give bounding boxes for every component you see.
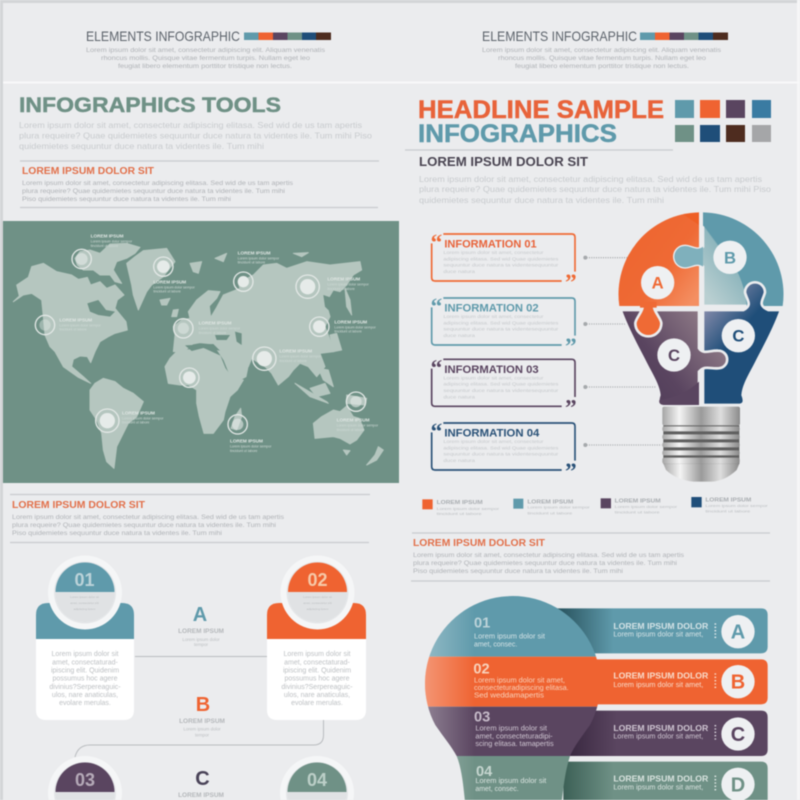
bar D: Lorem ipsum dolor sit amet,: [613, 784, 703, 791]
map labels: LOREM IPSUM: [238, 250, 271, 255]
section: lorem ipsum heading left top: Piso quidemietes sequuntur duce natura ta videntes ile. Tum mihi: [22, 196, 231, 203]
bar A: A: [731, 622, 745, 644]
information 04: adipiscing elitasa. Sed wid Quae quidemietes: [443, 445, 559, 451]
bar D: D: [731, 774, 745, 796]
legend: Lorem ipsum dolor sempor: [527, 506, 591, 510]
bar C: C: [731, 724, 745, 746]
bulb badge A: A: [652, 274, 664, 293]
label A: Lorem ipsum dolor: [182, 637, 220, 642]
band 02 text: [473, 661, 569, 699]
map labels: Lorem ipsum dolor sempor: [337, 424, 379, 428]
bar A: [557, 608, 768, 653]
panel: puzzle bulb and information boxes: [422, 212, 783, 516]
band 01 text: [474, 616, 545, 648]
map labels: tincidunt ut labore: [238, 261, 265, 265]
map labels: Lorem ipsum dolor sempor: [59, 323, 102, 327]
information 03: [431, 355, 577, 421]
card 01: Lorem ipsum dolor sit: [52, 651, 119, 658]
panel: striped bulb chart: [420, 592, 768, 800]
map labels: LOREM IPSUM: [199, 321, 232, 326]
map labels: tincidunt ut labore: [279, 359, 307, 363]
colour swatches: [675, 100, 771, 142]
card 02: evolare merulas.: [291, 700, 343, 707]
label A: LOREM IPSUM: [178, 628, 224, 635]
map labels: tincidunt ut labore: [230, 449, 258, 453]
section: lorem ipsum heading left top: Lorem ipsum dolor sit amet, consectetur adipiscing elitasa. Sed wid de us tam apertis: [22, 180, 294, 187]
section: lorem ipsum heading left bottom: [10, 494, 370, 542]
map labels: tincidunt ut labore: [337, 428, 364, 432]
map labels: LOREM IPSUM: [337, 418, 370, 423]
information 02: INFORMATION 02: [444, 303, 539, 315]
header: left elements infographic: rhoncus mollis. Quisque vitae fermentum turpis. Nullam eget leo: [101, 55, 310, 62]
information 03: “: [431, 355, 442, 381]
subheading right: Lorem ipsum dolor sit amet, consectetur adipiscing elitasa. Sed wid de us tam apertis: [419, 174, 762, 184]
label B: B: [196, 694, 210, 716]
band 01 text: Lorem ipsum dolor sit: [474, 633, 545, 640]
legend: Lorem ipsum dolor sempor: [705, 504, 769, 508]
card 02: ulos, nare anaticulas,: [284, 692, 350, 699]
card 02: Lorem ipsum dolor sit: [303, 595, 332, 599]
section: lorem ipsum heading right bottom: LOREM IPSUM DOLOR SIT: [413, 538, 545, 549]
title: infographics tools: INFOGRAPHICS TOOLS: [19, 94, 281, 117]
legend: LOREM IPSUM: [437, 500, 483, 506]
band 02 text: Lorem ipsum dolor sit amet,: [474, 678, 565, 685]
card 01: evolare merulas.: [59, 700, 111, 707]
bulb bands: [420, 592, 607, 800]
map labels: tincidunt ut labore: [153, 290, 181, 294]
information 03: duce natura: [443, 394, 475, 400]
label B: LOREM IPSUM: [179, 718, 225, 725]
label C: [178, 768, 224, 799]
legend: tincidunt ut labore: [615, 511, 660, 515]
card 02: Lorem ipsum dolor sit: [284, 651, 351, 658]
card 02: amet, consectetur elit: [303, 601, 332, 605]
headline sample: HEADLINE SAMPLE: [418, 96, 664, 124]
map labels: [59, 234, 379, 453]
legend: [422, 497, 769, 516]
header: right elements infographic: rhoncus mollis. Quisque vitae fermentum turpis. Nullam eget leo: [498, 55, 706, 62]
card 01: ipiscing elit. Quidenim: [51, 668, 119, 674]
map labels: Lorem ipsum dolor sempor: [279, 355, 322, 359]
information 02: [431, 294, 577, 360]
legend: Lorem ipsum dolor sempor: [437, 507, 500, 511]
map labels: LOREM IPSUM: [122, 410, 155, 415]
information 04: ”: [565, 459, 577, 485]
header: left elements infographic: ELEMENTS INFOGRAPHIC: [86, 28, 240, 44]
bar B: B: [731, 672, 745, 694]
bar C: [570, 711, 768, 756]
card 03: 03: [75, 770, 95, 790]
band 02 text: consecteturadipiscing elitasa.: [474, 685, 569, 692]
map labels: tincidunt ut labore: [91, 244, 118, 248]
map labels: LOREM IPSUM: [230, 439, 263, 444]
information 02: ”: [565, 334, 577, 360]
map labels: LOREM IPSUM: [59, 317, 92, 322]
band 01 text: amet, consec.: [474, 641, 517, 648]
information 04: [431, 419, 577, 485]
section: lorem ipsum heading left bottom: Lorem ipsum dolor sit amet, consectetur adipiscing elitasa. Sed wid de us tam apertis: [12, 514, 285, 521]
legend: tincidunt ut labore: [527, 511, 572, 515]
bar A: LOREM IPSUM DOLOR: [613, 621, 709, 631]
connector lines: [75, 656, 324, 757]
map labels: Lorem ipsum dolor sempor: [334, 325, 377, 329]
card 01: [36, 556, 134, 720]
card 03: [48, 756, 122, 800]
map labels: LOREM IPSUM: [153, 279, 186, 284]
header: right elements infographic: ELEMENTS INFOGRAPHIC: [482, 28, 637, 44]
map labels: Lorem ipsum dolor sempor: [238, 256, 280, 260]
legend: LOREM IPSUM: [705, 497, 752, 503]
section: lorem ipsum heading left bottom: plura requeire? Quae quidemietes sequuntur duce natura ta videntes ile. Tum mihi: [12, 522, 276, 529]
headline sample: INFOGRAPHICS: [418, 120, 617, 148]
map labels: Lorem ipsum dolor sempor: [230, 445, 272, 449]
legend: Lorem ipsum dolor sempor: [615, 505, 678, 509]
map labels: Lorem ipsum dolor sempor: [122, 416, 164, 420]
band 03 text: amet, consecteturadipi-: [475, 733, 553, 740]
information 01: Lorem ipsum dolor sit amet, consectetur: [443, 250, 544, 256]
headline sample: [418, 96, 664, 148]
dotted leader lines: [583, 256, 662, 447]
information 01: INFORMATION 01: [444, 239, 537, 251]
header: right elements infographic: [482, 28, 728, 70]
information 03: INFORMATION 03: [444, 364, 539, 376]
label A: tempor: [194, 642, 208, 647]
card 01: amet, consectaturad-: [52, 660, 119, 666]
band 01 text: 01: [474, 616, 490, 632]
map labels: LOREM IPSUM: [327, 277, 360, 282]
map labels: tincidunt ut labore: [59, 328, 87, 332]
map labels: tincidunt ut labore: [122, 421, 150, 425]
card 02: 02: [307, 570, 328, 590]
section: lorem ipsum heading left bottom: LOREM IPSUM DOLOR SIT: [12, 500, 145, 511]
information 03: adipiscing elitasa. Sed wid Quae quidemietes: [443, 382, 559, 388]
label C: C: [195, 768, 210, 790]
information 01: “: [431, 230, 442, 256]
inland seas: [87, 295, 333, 351]
information 03: ”: [565, 395, 577, 421]
legend: tincidunt ut labore: [705, 510, 750, 514]
subheading right: quidemietes sequuntur duce natura ta videntes ile. Tum mihi: [419, 195, 664, 205]
band 04 text: amet, consec.: [475, 786, 519, 793]
band 04 text: 04: [476, 764, 493, 780]
information 04: “: [431, 419, 442, 445]
bar B: [597, 659, 768, 704]
bar A: Lorem ipsum dolor sit amet,: [613, 632, 703, 639]
card 01: amet, consectetur elit: [70, 601, 99, 605]
section: lorem ipsum heading right bottom: [411, 533, 770, 581]
header: left elements infographic: feugiat libero elementum porttitor tristique non lectus.: [118, 63, 292, 70]
section: lorem ipsum heading left top: LOREM IPSUM DOLOR SIT: [22, 166, 154, 177]
information 04: Lorem ipsum dolor sit amet, consectetur: [443, 439, 544, 445]
card 02: adipiscing lorem: [307, 607, 329, 611]
information 01: adipiscing elitasa. Sed wid Quae quidemietes: [443, 256, 559, 262]
section: lorem ipsum heading left top: plura requeire? Quae quidemietes sequuntur duce natura ta videntes ile. Tum mihi: [22, 188, 285, 195]
label C: LOREM IPSUM: [178, 792, 224, 799]
card 01: adipiscing lorem: [74, 607, 96, 611]
lightbulb puzzle: [618, 212, 783, 405]
information 04: sequuntur duce natura ta videntesequuntur: [443, 452, 559, 458]
map labels: Lorem ipsum dolor sempor: [153, 285, 196, 289]
bulb badge B: [713, 241, 747, 274]
section: lorem ipsum heading left top: [20, 161, 379, 208]
card 02: ipiscing elit. Quidenim: [283, 668, 351, 674]
label B: [179, 694, 225, 738]
section: lorem ipsum heading right bottom: plura requeire? Quae quidemietes sequuntur duce natura ta videntes ile. Tum mihi: [413, 560, 677, 567]
band 02 text: 02: [473, 661, 490, 677]
card 01: divinius?Serpereaguic-: [49, 684, 121, 691]
band 03 text: Lorem ipsum dolor sit: [475, 726, 547, 733]
band 02 text: Sed weddamapertis: [474, 692, 545, 699]
card 01: 01: [74, 570, 95, 590]
information 01: ”: [565, 270, 577, 296]
band 04 text: [475, 764, 546, 793]
bulb socket: [662, 407, 740, 482]
subheading right: LOREM IPSUM DOLOR SIT: [419, 155, 588, 169]
legend: tincidunt ut labore: [437, 512, 482, 516]
bulb badge B: B: [724, 248, 736, 267]
map labels: Lorem ipsum dolor sempor: [327, 283, 370, 287]
map labels: tincidunt ut labore: [327, 287, 355, 291]
intro paragraph left: Lorem ipsum dolor sit amet, consectetur adipiscing elitasa. Sed wid de us tam apertis: [19, 120, 362, 130]
information 03: Lorem ipsum dolor sit amet, consectetur: [443, 375, 544, 381]
information 02: sequuntur duce natura ta videntesequuntur: [443, 327, 559, 333]
bar B: LOREM IPSUM DOLOR: [613, 671, 709, 681]
section: lorem ipsum heading left bottom: Piso quidemietes sequuntur duce natura ta videntes ile. Tum mihi: [12, 530, 222, 537]
card 04: [280, 756, 354, 800]
legend: LOREM IPSUM: [615, 499, 661, 505]
card 02: amet, consectaturad-: [284, 660, 351, 666]
map markers: [35, 234, 379, 453]
information 03: sequuntur duce natura ta videntesequuntur: [443, 388, 559, 394]
card 01: ulos, nare anaticulas,: [52, 692, 118, 699]
information 02: duce natura: [443, 333, 475, 339]
label B: tempor: [195, 732, 209, 738]
information 02: adipiscing elitasa. Sed wid Quae quidemietes: [443, 320, 559, 326]
map labels: LOREM IPSUM: [91, 234, 124, 239]
bar D: [563, 762, 768, 800]
card 01: possumus hoc agere: [53, 676, 118, 682]
panel: world map: [3, 221, 399, 483]
band 03 text: scing elitasa. tamapertis: [475, 741, 554, 748]
bar D: LOREM IPSUM DOLOR: [613, 773, 709, 783]
information 01: duce natura: [443, 269, 475, 275]
intro paragraph left: quidemietes sequuntur duce natura ta videntes ile. Tum mihi: [19, 141, 264, 151]
map labels: LOREM IPSUM: [334, 319, 367, 324]
map labels: tincidunt ut labore: [334, 330, 362, 334]
band 03 text: 03: [474, 710, 490, 726]
information 04: INFORMATION 04: [444, 428, 540, 440]
map labels: LOREM IPSUM: [279, 349, 312, 354]
intro paragraph left: [19, 120, 372, 151]
information 04: duce natura: [443, 458, 475, 464]
map labels: tincidunt ut labore: [199, 331, 226, 335]
intro paragraph left: plura requeire? Quae quidemietes sequuntur duce natura ta videntes ile. Tum mihi Piso: [19, 130, 372, 140]
label A: [178, 604, 224, 647]
bar C: LOREM IPSUM DOLOR: [613, 723, 709, 733]
label A: A: [193, 604, 207, 626]
band 04 text: Lorem ipsum dolor sit: [475, 778, 546, 785]
card 02: [267, 556, 366, 720]
card 04: 04: [307, 770, 327, 790]
continents: [13, 243, 383, 468]
bar B: Lorem ipsum dolor sit amet,: [613, 682, 703, 689]
map labels: Lorem ipsum dolor sempor: [199, 327, 241, 331]
bulb badge C left: C: [668, 346, 680, 365]
section: lorem ipsum heading right bottom: Lorem ipsum dolor sit amet, consectetur adipiscing elitasa. Sed wid de us tam apertis: [413, 552, 685, 559]
bar C: Lorem ipsum dolor sit amet,: [613, 734, 703, 741]
section: lorem ipsum heading right bottom: Piso quidemietes sequuntur duce natura ta videntes ile. Tum mihi: [413, 568, 623, 575]
information 02: Lorem ipsum dolor sit amet, consectetur: [443, 314, 544, 320]
header: left elements infographic: [86, 28, 331, 70]
band 03 text: [474, 710, 554, 748]
bulb badge C right: [722, 319, 755, 352]
header: right elements infographic: Lorem ipsum dolor sit amet, consectetur adipiscing elit. Aliquam venenatis: [482, 47, 722, 54]
subheading right: plura requeire? Quae quidemietes sequuntur duce natura ta videntes ile. Tum mihi Piso: [419, 184, 771, 194]
subheading right: [405, 150, 771, 205]
card 02: possumus hoc agere: [285, 676, 350, 682]
label B: Lorem ipsum dolor: [183, 726, 221, 732]
bulb badge C left: [657, 338, 691, 372]
information 01: sequuntur duce natura ta videntesequuntur: [443, 263, 559, 269]
information 02: “: [431, 294, 442, 320]
bulb badge C right: C: [732, 327, 744, 346]
card 01: Lorem ipsum dolor sit: [70, 595, 99, 599]
card 02: divinius?Serpereaguic-: [281, 684, 353, 691]
header: right elements infographic: feugiat libero elementum porttitor tristique non lectus.: [515, 63, 689, 70]
map labels: Lorem ipsum dolor sempor: [91, 240, 133, 244]
information 01: [431, 230, 577, 296]
bulb badge A: [641, 266, 674, 299]
header: left elements infographic: Lorem ipsum dolor sit amet, consectetur adipiscing elit. Aliquam venenatis: [86, 47, 326, 54]
legend: LOREM IPSUM: [527, 499, 574, 505]
